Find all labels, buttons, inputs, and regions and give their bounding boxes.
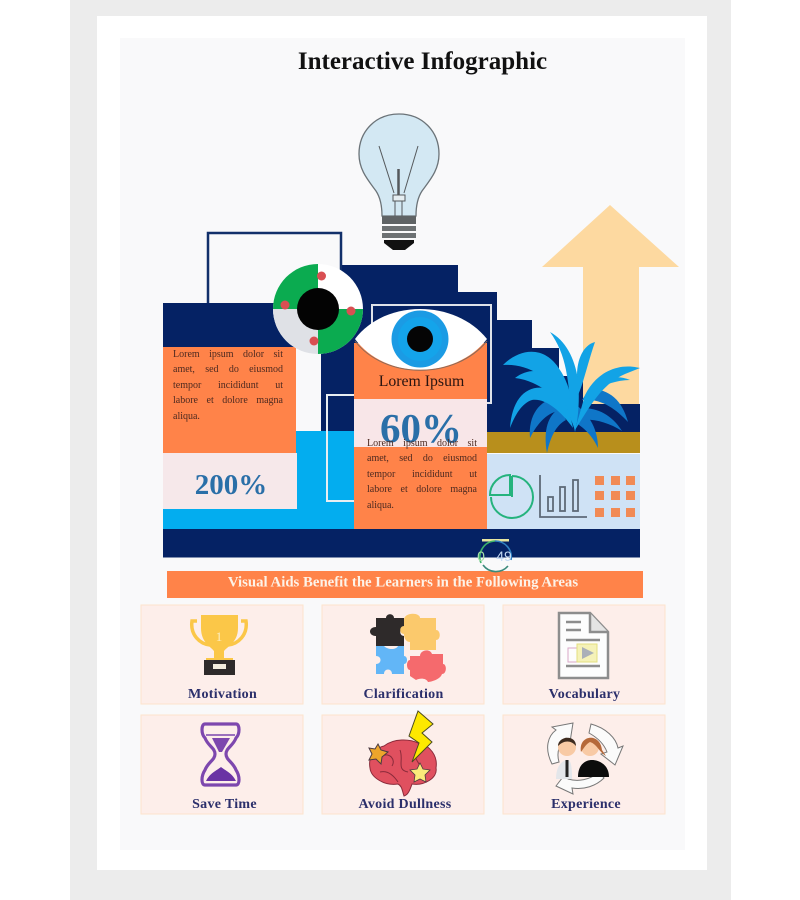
navy frame: [208, 233, 341, 305]
panel: center orange text: [354, 447, 487, 529]
card: Vocabulary: [503, 605, 665, 704]
card: Clarification: Clarification: [363, 687, 444, 702]
text block: left lorem: amet, sed do eiusmod: [173, 364, 283, 375]
panel: 200% card: [163, 453, 297, 509]
card: Experience: Experience: [551, 797, 621, 812]
orange banner: Visual Aids Benefit the Learners in the Following Areas: [228, 574, 578, 590]
navy base band: [163, 529, 640, 558]
card: Clarification: [322, 605, 484, 704]
text block: center lorem: amet, sed do eiusmod: [367, 453, 477, 464]
frame: white lower: [327, 395, 357, 501]
panel: center orange label: [354, 343, 487, 399]
icon: brain with lightning: [369, 711, 436, 796]
card: Save Time: [141, 715, 303, 814]
text block: left lorem: aliqua.: [173, 411, 200, 422]
card: Motivation: Motivation: [188, 687, 257, 702]
card: Avoid Dullness: [322, 711, 484, 814]
card: Save Time: Save Time: [192, 797, 257, 812]
card: Avoid Dullness: Avoid Dullness: [358, 797, 452, 812]
card: Vocabulary: Vocabulary: [549, 687, 620, 702]
icon: target ring: [273, 264, 363, 354]
icon: trophy: 1: [216, 629, 222, 644]
text block: left lorem: labore et dolore magna: [173, 395, 283, 406]
panel: 60% card: [354, 399, 487, 451]
light blue panel: [487, 454, 640, 529]
card: Motivation: [141, 605, 303, 704]
text block: center lorem: [367, 438, 477, 511]
small gauge: 49: [496, 548, 512, 564]
text block: center lorem: Lorem ipsum dolor sit: [367, 438, 477, 449]
icon: bar chart: [540, 475, 587, 517]
icon: pie chart: [490, 475, 533, 518]
panel: left orange: [163, 347, 296, 453]
icon: trophy: [192, 615, 246, 675]
cyan block: [163, 431, 354, 529]
icon: light bulb: [359, 114, 439, 250]
text block: center lorem: tempor incididunt ut: [367, 469, 477, 480]
text block: left lorem: tempor incididunt ut: [173, 380, 283, 391]
panel: 200% card: 200%: [195, 469, 267, 501]
icon: people cycle: [548, 723, 623, 794]
card: Experience: [503, 715, 665, 814]
small gauge: 0: [477, 548, 485, 564]
text block: left lorem: [173, 349, 283, 422]
small gauge: [477, 539, 512, 572]
frame: white upper: [372, 305, 491, 403]
icon: plant: [503, 332, 640, 453]
icon: dot grid: [595, 476, 635, 517]
icon: puzzle: [370, 614, 446, 682]
label: Lorem Ipsum: Lorem Ipsum: [379, 373, 465, 390]
icon: eye: [355, 309, 487, 370]
navy stepped background: [163, 265, 640, 433]
text block: left lorem: Lorem ipsum dolor sit: [173, 349, 283, 360]
panel: 60% card: 60%: [380, 405, 462, 451]
title: Interactive Infographic: [298, 48, 547, 75]
icon: document: [559, 613, 608, 678]
text block: center lorem: labore et dolore magna: [367, 484, 477, 495]
arrow: growth: [542, 205, 679, 410]
gold band: [487, 432, 640, 453]
orange banner: [167, 571, 643, 598]
icon: hourglass: [202, 724, 239, 785]
text block: center lorem: aliqua.: [367, 500, 394, 511]
